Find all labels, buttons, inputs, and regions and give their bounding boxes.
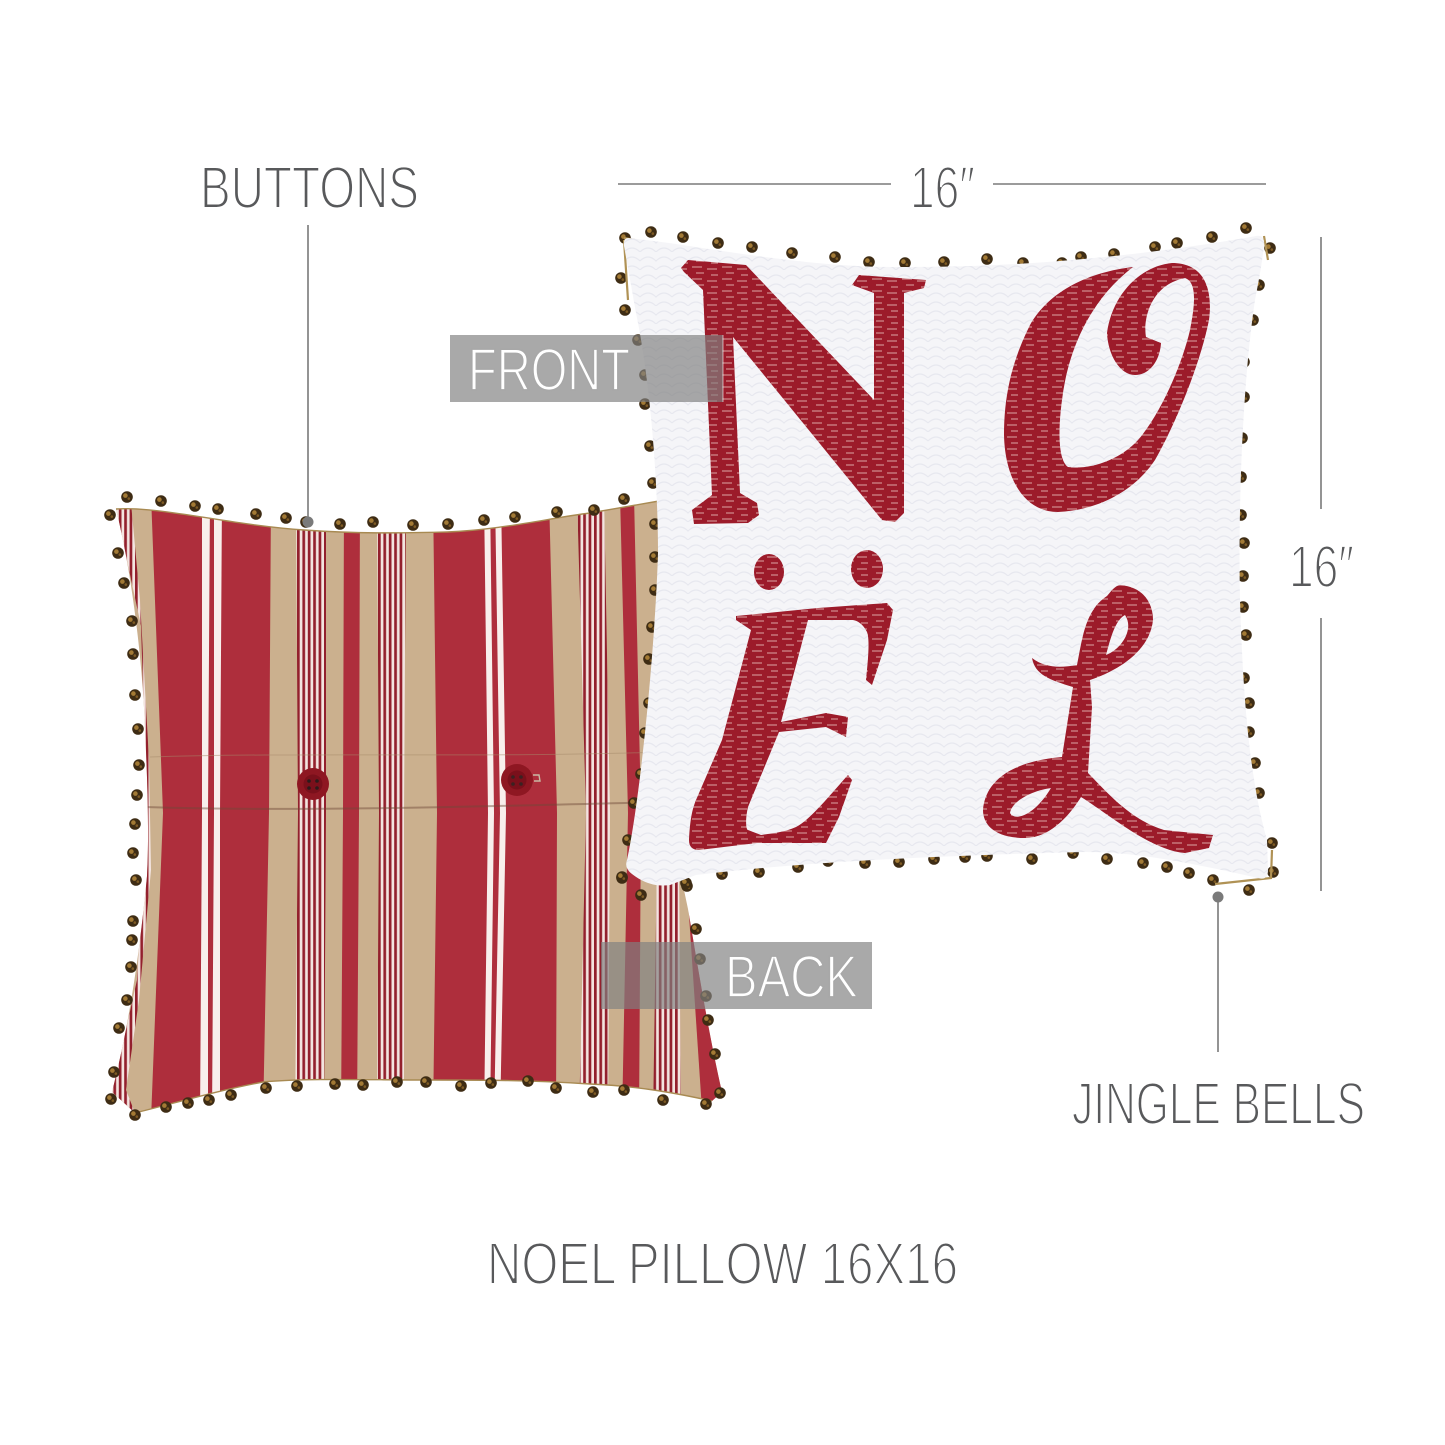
dimension: height 16 inches: 16″ [1289,534,1354,600]
rope edge [116,501,659,533]
tag: back: BACK [725,944,858,1010]
tag: front: FRONT [468,337,630,403]
title: NOEL PILLOW 16X16 [487,1231,958,1297]
flap fold [145,802,665,809]
letter E with diaeresis [689,550,893,850]
letter L [983,585,1213,853]
callout line: buttons [302,225,314,528]
pillow cover [624,236,1268,886]
letter O [1004,263,1210,512]
narrow candy stripes [112,495,681,1120]
tag: back [601,942,872,1010]
panel: front of pillow [615,222,1279,896]
label: buttons: BUTTONS [200,155,419,221]
rope edge front [624,236,1272,884]
panel: back of pillow [100,490,740,1130]
callout line: jingle bells [1212,892,1224,1052]
white stripes [200,495,506,1120]
red stripes [151,495,730,1120]
dimension: width 16 inches: 16″ [910,155,975,221]
button left [297,768,329,800]
jingle bells on back pillow [104,491,726,1121]
button right [501,764,540,796]
jingle bells on front pillow [615,222,1279,896]
letter N [681,260,926,524]
